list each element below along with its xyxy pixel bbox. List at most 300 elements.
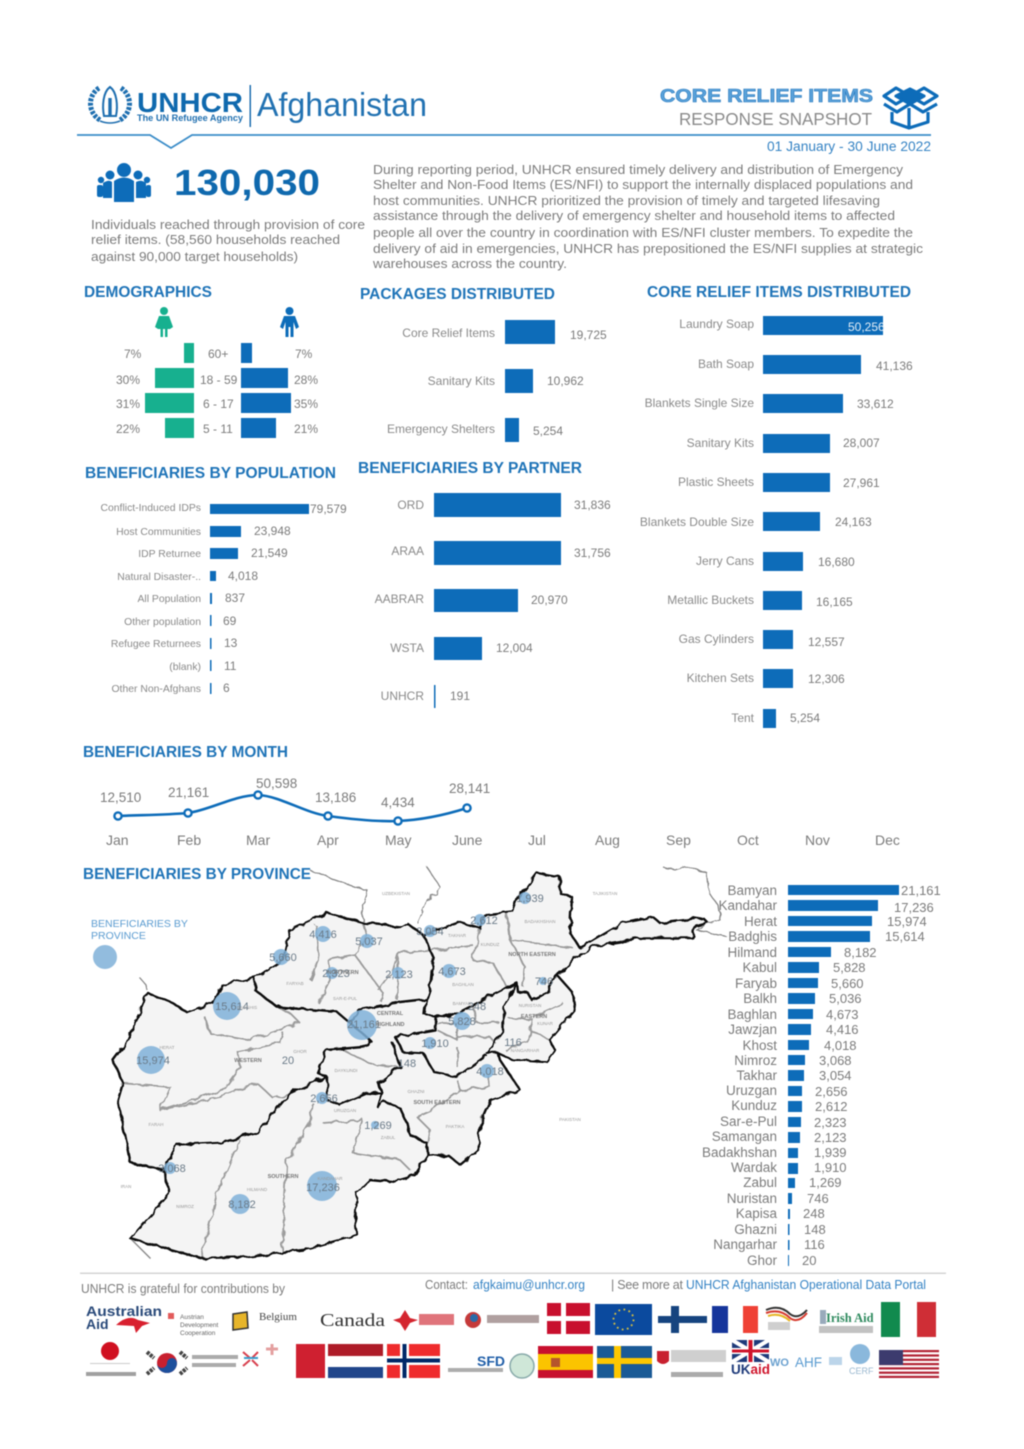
map bubbles (137, 892, 547, 1214)
map region and province names: BADGHIS (237, 1005, 257, 1010)
map region and province names: HILMAND (247, 1187, 268, 1192)
map value labels: 1,939 (516, 893, 544, 905)
panel: beneficiaries by partner (358, 460, 611, 708)
intro paragraph: delivery of aid in emergencies, UNHCR has prepositioned the ES/NFI supplies at strategic (373, 241, 924, 256)
bar chart: population: Conflict-Induced IDPs (100, 503, 201, 514)
percent and age labels: 6 - 17 (203, 397, 234, 411)
panel: core relief items distributed (640, 284, 913, 728)
logo: Irish Aid: Irish Aid (826, 1311, 874, 1325)
intro paragraph: people all over the country in coordination with ES/NFI cluster members. To expedite the (373, 225, 913, 240)
bar chart: population: Other population (124, 617, 201, 628)
intro paragraph: assistance through the delivery of emergency shelter and household items to affected (373, 208, 895, 223)
map region and province names: HIGHLAND (375, 1022, 405, 1028)
bar chart: province ranking: 746 (807, 1191, 829, 1206)
map region and province names: KUNDUZ (481, 942, 500, 947)
map region and province names: SAR-E-PUL (333, 996, 357, 1001)
bar chart: province ranking: Badghis (728, 929, 777, 944)
map value labels: 2,612 (470, 915, 498, 927)
bar chart: province ranking: Kabul (742, 960, 777, 975)
panel: beneficiaries by population (85, 465, 347, 695)
tagline: The UN Refugee Agency (137, 113, 243, 123)
map region and province names: WESTERN (234, 1058, 262, 1064)
map value labels: 2,123 (385, 969, 413, 981)
logo: Austrian Development Cooperation: Development (180, 1322, 218, 1329)
percent and age labels: 7% (295, 347, 313, 361)
line chart: monthly: Jul (528, 832, 546, 848)
logo: Canada: Canada (320, 1310, 385, 1330)
map value labels: 2,323 (322, 968, 350, 980)
bar chart: province ranking: Balkh (743, 991, 777, 1006)
map value labels: 4,018 (476, 1066, 504, 1078)
bar chart: population: (blank) (169, 662, 201, 673)
bar chart: province ranking: Faryab (735, 976, 777, 991)
map region and province names: BADAKHSHAN (524, 919, 556, 924)
percent and age labels (116, 347, 318, 436)
description (91, 217, 365, 264)
panel: packages distributed (360, 286, 607, 442)
bar chart: province ranking (702, 883, 941, 1268)
map region and province names: PAKISTAN (559, 1117, 581, 1122)
logo: Austrian Development Cooperation (168, 1313, 218, 1337)
bar chart: partner: 20,970 (531, 593, 568, 607)
bar chart: province ranking: 148 (804, 1222, 826, 1237)
bar chart: province ranking: 4,673 (826, 1007, 859, 1022)
map value labels: 5,660 (269, 952, 297, 964)
map value labels: 2,656 (310, 1093, 338, 1105)
flag: Spain (538, 1346, 593, 1378)
bar chart: province ranking: Zabul (743, 1175, 777, 1190)
bar chart: province ranking: 4,416 (826, 1022, 859, 1037)
bar chart: partner: 12,004 (496, 641, 533, 655)
bar chart: items: 16,680 (818, 555, 855, 569)
line chart: monthly: 12,510 (100, 790, 141, 805)
map value labels: 248 (468, 1001, 486, 1013)
bar chart: partner: UNHCR (381, 689, 424, 703)
bar chart: items: Gas Cylinders (679, 632, 754, 646)
bar chart: population: 11 (224, 659, 237, 673)
bar chart: province ranking: Hilmand (727, 945, 777, 960)
logo: WHO / AHF: AHF (795, 1355, 822, 1370)
bar chart: province ranking: 20 (802, 1253, 816, 1268)
intro paragraph: During reporting period, UNHCR ensured timely delivery and distribution of Emergency (373, 162, 904, 177)
logo: Australian Aid: Australian (86, 1303, 162, 1319)
bar chart: province ranking: Kapisa (736, 1206, 777, 1221)
bar chart: province ranking: 2,656 (815, 1084, 848, 1099)
see more: | See more at (611, 1278, 684, 1292)
bar chart: province ranking: 17,236 (894, 900, 934, 915)
map value labels: 15,614 (215, 1001, 249, 1013)
bar chart: population: 837 (225, 591, 245, 605)
bar chart: items: Jerry Cans (696, 554, 754, 568)
bar chart: province ranking: 15,614 (885, 929, 925, 944)
bar chart: items: Tent (731, 711, 755, 725)
line chart: monthly: June (452, 832, 483, 848)
bar chart: items: 16,165 (816, 595, 853, 609)
bar chart: partner (375, 493, 611, 708)
line chart: monthly: Dec (875, 832, 900, 848)
heading: packages: PACKAGES DISTRIBUTED (360, 286, 555, 303)
logo: UK aid: UKaid (731, 1362, 770, 1377)
map region and province names: NORTHERN (327, 970, 359, 976)
flag: France (712, 1306, 758, 1333)
icon: relief box (884, 88, 937, 128)
map value labels: 20 (282, 1055, 294, 1067)
map legend (91, 918, 188, 969)
bar chart: province ranking: Jawzjan (728, 1022, 777, 1037)
footer text (81, 1278, 926, 1296)
bar chart: items: Bath Soap (698, 357, 754, 371)
line chart: monthly: Oct (737, 832, 759, 848)
bar chart: province ranking: Takhar (736, 1068, 777, 1083)
heading: core relief items: CORE RELIEF ITEMS (660, 86, 873, 106)
bar chart: population: 6 (223, 681, 230, 695)
bar chart: items: Blankets Single Size (645, 396, 754, 410)
bar chart: items: Sanitary Kits (687, 436, 754, 450)
bar chart: province ranking: Ghazni (734, 1222, 777, 1237)
line chart: monthly: Aug (595, 832, 620, 848)
map region and province names (121, 891, 617, 1209)
line chart: monthly: 4,434 (381, 795, 415, 810)
map: Afghanistan regions and provinces (113, 866, 727, 1258)
bar chart: population: 21,549 (251, 546, 288, 560)
bar: emergency shelters: Emergency Shelters (387, 422, 495, 436)
bar: sanitary kits: 10,962 (547, 374, 584, 388)
map region and province names: BAGHLAN (452, 982, 474, 987)
bar chart: province ranking: 1,910 (814, 1160, 847, 1175)
logo: Belgium: Belgium (259, 1311, 297, 1323)
header: report title (660, 86, 931, 154)
icon: group of people (97, 163, 151, 202)
bar chart: items: 24,163 (835, 515, 872, 529)
bar chart: province ranking: Nangarhar (713, 1237, 777, 1252)
map value labels: 15,974 (136, 1055, 170, 1067)
bar chart: partner: 31,836 (574, 498, 611, 512)
logo: Austrian Development Cooperation: Austrian (180, 1314, 204, 1321)
percent and age labels: 18 - 59 (200, 373, 238, 387)
flag: USA (879, 1350, 939, 1378)
bar chart: population: IDP Returnee (138, 549, 201, 560)
panel: beneficiaries by month (83, 744, 900, 848)
logo: Japan (86, 1342, 136, 1376)
bar chart: population: 4,018 (228, 569, 258, 583)
bar chart: items: 50,256 (848, 320, 885, 334)
flag: Italy (881, 1302, 936, 1337)
bar: emergency shelters (387, 418, 563, 442)
map value labels: 3,068 (158, 1163, 186, 1175)
bar chart: items: 12,306 (808, 672, 845, 686)
panel: beneficiaries by province map (83, 866, 727, 1258)
title: Afghanistan: Afghanistan (257, 86, 427, 123)
line chart: monthly: Apr (317, 832, 339, 848)
heading: by province: BENEFICIARIES BY PROVINCE (83, 866, 311, 883)
logo: China Aid (393, 1310, 454, 1331)
logo: Switzerland (657, 1350, 726, 1377)
line chart: monthly: Feb (177, 832, 201, 848)
bar chart: population: 13 (224, 636, 238, 650)
map value labels: 3,054 (416, 926, 444, 938)
percent and age labels: 5 - 11 (203, 422, 233, 436)
bar chart: population: 23,948 (254, 524, 291, 538)
logo: Australian Aid (86, 1303, 162, 1333)
intro paragraph: host communities. UNHCR prioritized the provision of timely and targeted lifesaving (373, 193, 880, 208)
logo: WHO / AHF (770, 1355, 842, 1370)
logo: UK aid (731, 1340, 770, 1377)
bar chart: province ranking: Ghor (747, 1253, 778, 1268)
bar: core relief items: 19,725 (570, 328, 607, 342)
map region and province names: PAKTIKA (446, 1124, 464, 1129)
logo: Germany (766, 1308, 807, 1330)
icon: female (155, 307, 173, 337)
icon: male (280, 307, 299, 337)
map region and province names: HERAT (160, 1045, 175, 1050)
bar chart: province ranking: 2,612 (815, 1099, 848, 1114)
map legend: PROVINCE (91, 930, 146, 942)
header: logo and title (90, 85, 427, 127)
bar chart: population: Host Communities (116, 527, 201, 538)
percent and age labels: 7% (124, 347, 142, 361)
bar chart: population: Natural Disaster-.. (117, 572, 201, 583)
bar chart: items: Kitchen Sets (687, 671, 754, 685)
logo: SFD: SFD (477, 1353, 505, 1369)
icon: UNHCR emblem (90, 87, 130, 123)
heading: by month: BENEFICIARIES BY MONTH (83, 744, 288, 761)
bar chart: items: Blankets Double Size (640, 515, 754, 529)
UNHCR wordmark: UNHCR (137, 87, 243, 118)
map region and province names: TAJIKISTAN (593, 891, 617, 896)
bar chart: province ranking: Nuristan (727, 1191, 777, 1206)
bar chart: items: Metallic Buckets (667, 593, 754, 607)
bar chart: province ranking: Wardak (731, 1160, 777, 1175)
map region and province names: GHOR (293, 1049, 308, 1054)
bar chart: partner: 191 (450, 689, 470, 703)
map value labels: 8,182 (228, 1199, 256, 1211)
bar chart: province ranking: 3,068 (819, 1053, 852, 1068)
data portal link: UNHCR Afghanistan Operational Data Portal (686, 1278, 926, 1292)
bar chart: province ranking: Nimroz (734, 1053, 777, 1068)
map region and province names: URUZGAN (334, 1108, 356, 1113)
bar chart: partner: ORD (397, 498, 424, 512)
line chart: monthly: May (385, 832, 411, 848)
bar chart: province ranking: 8,182 (844, 945, 877, 960)
line chart: monthly: Sep (666, 832, 691, 848)
logo: Irish Aid (819, 1310, 874, 1333)
bar chart: province ranking: Herat (744, 914, 777, 929)
line chart: monthly: 50,598 (256, 776, 297, 791)
intro paragraph: Shelter and Non-Food Items (ES/NFI) to support the internally displaced populations and (373, 177, 913, 192)
map region and province names: FARAH (148, 1122, 164, 1127)
bar chart: province ranking: Baghlan (727, 1007, 777, 1022)
map value labels: 17,236 (306, 1182, 340, 1194)
intro paragraph: warehouses across the country. (372, 256, 567, 271)
line chart: monthly: 21,161 (168, 785, 209, 800)
contact: Contact: (425, 1278, 468, 1292)
map region and province names: CENTRAL (377, 1011, 404, 1017)
map value labels (136, 893, 553, 1211)
flag: EU (595, 1304, 652, 1335)
bar chart: items: Plastic Sheets (678, 475, 754, 489)
map value labels: 21,161 (347, 1019, 381, 1031)
bar chart: population: 69 (223, 614, 237, 628)
bar chart: population: Refugee Returnees (111, 639, 201, 650)
map value labels: 116 (504, 1037, 522, 1049)
line chart: monthly: Nov (805, 832, 830, 848)
map region and province names: UZBEKISTAN (382, 891, 410, 896)
line chart: monthly: 28,141 (449, 781, 490, 796)
map value labels: 4,416 (309, 929, 337, 941)
flag: Denmark (547, 1303, 590, 1334)
flag: Monaco red (296, 1344, 325, 1378)
bar: emergency shelters: 5,254 (533, 424, 563, 438)
bar: core relief items: Core Relief Items (402, 326, 495, 340)
bars: male (241, 343, 291, 438)
logo: WHO / AHF: WO (770, 1357, 789, 1369)
bar chart: province ranking: 2,123 (814, 1130, 847, 1145)
map value labels: 5,037 (355, 936, 383, 948)
map region and province names: KUNAR (537, 1021, 554, 1026)
percent and age labels: 21% (294, 422, 318, 436)
bar chart: province ranking: Sar-e-Pul (720, 1114, 777, 1129)
line chart: monthly: Jan (106, 832, 129, 848)
map region and province names: NIMROZ (176, 1204, 194, 1209)
heading: by population: BENEFICIARIES BY POPULATION (85, 465, 336, 482)
percent and age labels: 60+ (208, 347, 228, 361)
flag: Finland (658, 1306, 707, 1333)
bar chart: items: 27,961 (843, 476, 880, 490)
heading: demographics: DEMOGRAPHICS (84, 284, 212, 301)
map region and province names: TAKHAR (448, 933, 467, 938)
bar chart: items: 5,254 (790, 711, 820, 725)
map value labels: 1,269 (364, 1120, 392, 1132)
bar chart: items: 28,007 (843, 436, 880, 450)
heading: by partner: BENEFICIARIES BY PARTNER (358, 460, 582, 477)
map region and province names: KANDAHAR (317, 1176, 343, 1181)
map value labels: 1,910 (421, 1038, 449, 1050)
bar: sanitary kits (428, 369, 584, 393)
bar chart: population (100, 502, 347, 695)
bar chart: population: 79,579 (310, 502, 347, 516)
intro paragraph (372, 162, 924, 271)
bar chart: items: Laundry Soap (679, 317, 754, 331)
logo: CERF: CERF (849, 1366, 874, 1376)
bar chart: province ranking: 1,269 (809, 1175, 842, 1190)
flag: Netherlands (328, 1344, 383, 1378)
line chart: monthly: Mar (246, 832, 270, 848)
bar chart: province ranking: 248 (803, 1206, 825, 1221)
bar chart: partner: ARAA (391, 544, 424, 558)
bar: core relief items (402, 320, 607, 344)
bar chart: province ranking: 5,828 (833, 960, 866, 975)
map region and province names: FARYAB (286, 981, 304, 986)
bar chart: province ranking: Bamyan (727, 883, 777, 898)
bar chart: province ranking: 3,054 (819, 1068, 852, 1083)
map region and province names: SOUTH EASTERN (413, 1100, 461, 1106)
map value labels: 746 (535, 976, 553, 988)
map region and province names: DAYKUNDI (335, 1068, 357, 1073)
line chart: monthly (100, 776, 900, 848)
contact email: afgkaimu@unhcr.org (473, 1278, 585, 1292)
percent and age labels: 31% (116, 397, 140, 411)
donor logos (86, 1302, 939, 1378)
bar chart: province ranking: 116 (804, 1237, 825, 1252)
bar chart: province ranking: Kunduz (731, 1098, 777, 1113)
map region and province names: EASTERN (521, 1014, 547, 1020)
number: 130,030: 130,030 (174, 162, 320, 203)
logo: Kuwait Fund (192, 1344, 278, 1367)
flag: Sweden (597, 1346, 652, 1378)
bar chart: province ranking: Samangan (712, 1129, 777, 1144)
logo: Austrian Development Cooperation: Cooperation (180, 1330, 216, 1337)
map value labels: 5,828 (448, 1016, 476, 1028)
bars: female (145, 343, 194, 438)
logo: SFD (448, 1353, 534, 1378)
percent and age labels: 28% (294, 373, 318, 387)
logo: CERF (849, 1344, 874, 1376)
bar chart: partner: WSTA (390, 641, 424, 655)
bar chart: items: 33,612 (857, 397, 894, 411)
bar: sanitary kits: Sanitary Kits (428, 374, 495, 388)
map value labels: 4,673 (438, 966, 466, 978)
map region and province names: GHAZNI (407, 1089, 425, 1094)
bar chart: items: 41,136 (876, 359, 913, 373)
bar chart: partner: 31,756 (574, 546, 611, 560)
logo: Qatar Aid (465, 1312, 539, 1328)
bar chart: province ranking: 5,660 (831, 976, 864, 991)
bar chart: province ranking: 15,974 (887, 914, 927, 929)
bar chart: province ranking: Uruzgan (726, 1083, 777, 1098)
map region and province names: IRAN (121, 1184, 131, 1189)
percent and age labels: 35% (294, 397, 318, 411)
bar chart: items: 12,557 (808, 635, 845, 649)
bar chart: province ranking: Kandahar (718, 898, 777, 913)
logo: Azerbaijan (233, 1312, 248, 1330)
bar chart: province ranking: Badakhshan (702, 1145, 777, 1160)
map region and province names: NANGARHAR (511, 1048, 540, 1053)
line chart: monthly: 13,186 (315, 790, 356, 805)
bar chart: province ranking: 5,036 (829, 991, 862, 1006)
panel: demographics (84, 284, 318, 438)
description: Individuals reached through provision of core (91, 217, 365, 232)
bar chart: province ranking: Khost (742, 1038, 777, 1053)
map region and province names: ZABUL (381, 1135, 396, 1140)
description: against 90,000 target households) (91, 249, 298, 264)
bar chart: province ranking: 2,323 (814, 1115, 847, 1130)
bar chart: population: Other Non-Afghans (111, 684, 201, 695)
date range: 01 January - 30 June 2022 (767, 139, 931, 154)
flag: Korea (147, 1352, 187, 1374)
flag: Norway (387, 1344, 440, 1378)
bar chart: province ranking: 4,018 (824, 1038, 857, 1053)
heading: core relief items distributed: CORE RELIEF ITEMS DISTRIBUTED (647, 284, 911, 301)
bar chart: province ranking: 1,939 (814, 1145, 847, 1160)
map region and province names: NORTH EASTERN (508, 952, 556, 958)
percent and age labels: 22% (116, 422, 140, 436)
map region and province names: SOUTHERN (268, 1174, 298, 1180)
description: relief items. (58,560 households reached (91, 232, 340, 247)
bar chart: province ranking: 21,161 (901, 883, 941, 898)
subheading: response snapshot: RESPONSE SNAPSHOT (679, 109, 872, 129)
logo: Australian Aid: Aid (86, 1316, 109, 1332)
bar chart: population: All Population (137, 594, 201, 605)
bar chart: items (640, 316, 913, 728)
map region and province names: BAMYAN (453, 1001, 471, 1006)
bar chart: partner: AABRAR (375, 592, 424, 606)
key figure block (91, 162, 365, 264)
header rule with chevron (77, 135, 931, 148)
percent and age labels: 30% (116, 373, 140, 387)
map region and province names: NURISTAN (519, 1003, 541, 1008)
map value labels: 148 (398, 1058, 416, 1070)
contributions note: UNHCR is grateful for contributions by (81, 1282, 286, 1296)
